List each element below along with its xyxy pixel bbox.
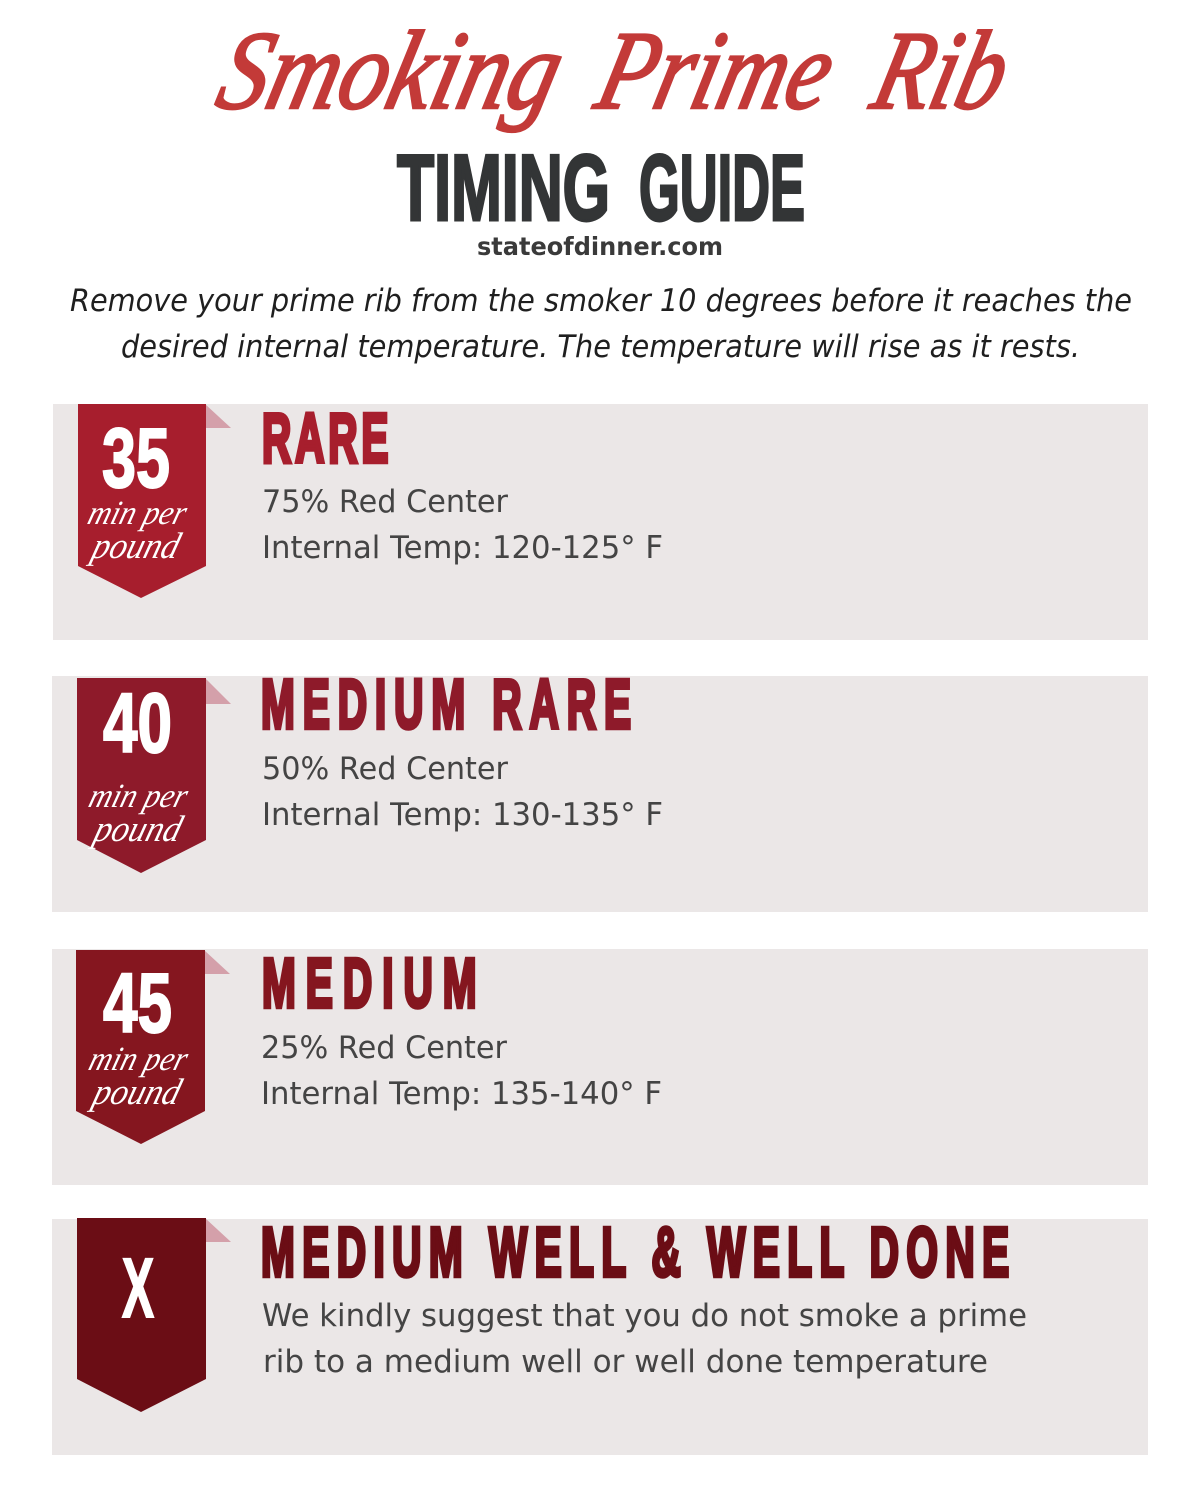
subtitle: Timing Guide: TIMING: [397, 135, 610, 240]
details: rare: [262, 484, 663, 566]
title: Smoking Prime Rib: Rib: [861, 9, 1022, 133]
icon: rare ribbon: [78, 404, 231, 598]
icon: rare ribbon: 35: [102, 411, 170, 505]
intro text: [70, 283, 1132, 365]
icon: rare ribbon: min per: [84, 494, 192, 532]
panel: medium well and well done: [52, 1214, 1148, 1455]
panel: medium: [52, 945, 1148, 1185]
details: medium well and well done: rib to a medium well or well done temperature: [263, 1344, 988, 1380]
details: medium: [261, 1030, 662, 1112]
details: rare: 75% Red Center: [262, 484, 508, 520]
icon: medium ribbon: [76, 950, 230, 1144]
intro text: Remove your prime rib from the smoker 10 degrees before it reaches the: [70, 283, 1132, 319]
heading: medium rare: MEDIUM RARE: [261, 666, 631, 744]
website: stateofdinner.com: [477, 232, 723, 261]
icon: medium rare ribbon: min per: [85, 777, 193, 815]
title: Smoking Prime Rib: Smoking: [207, 9, 576, 133]
details: medium: 25% Red Center: [261, 1030, 507, 1066]
details: medium rare: 50% Red Center: [262, 751, 508, 787]
icon: medium ribbon: pound: [86, 1072, 186, 1113]
icon: medium ribbon: 45: [103, 956, 172, 1050]
icon: X ribbon: X: [122, 1241, 154, 1335]
intro text: desired internal temperature. The temperature will rise as it rests.: [121, 329, 1080, 365]
icon: medium ribbon: min per: [85, 1040, 193, 1078]
subtitle: Timing Guide: GUIDE: [639, 135, 805, 240]
details: medium well and well done: [262, 1298, 1027, 1380]
icon: medium rare ribbon: pound: [87, 809, 187, 850]
panel: rare: [53, 400, 1148, 640]
icon: medium rare ribbon: [77, 676, 231, 873]
heading: medium well and well done: MEDIUM WELL & WELL DONE: [261, 1214, 1009, 1292]
details: medium rare: [262, 751, 663, 833]
details: medium: Internal Temp: 135-140° F: [261, 1076, 662, 1112]
heading: medium: MEDIUM: [262, 945, 477, 1023]
details: medium rare: Internal Temp: 130-135° F: [262, 797, 663, 833]
title: Smoking Prime Rib: Prime: [585, 9, 847, 133]
details: medium well and well done: We kindly suggest that you do not smoke a prime: [262, 1298, 1027, 1334]
icon: medium rare ribbon: 40: [103, 676, 172, 770]
panel: medium rare: [52, 666, 1148, 912]
heading: rare: RARE: [262, 400, 388, 478]
details: rare: Internal Temp: 120-125° F: [262, 530, 663, 566]
title: Smoking Prime Rib: [207, 9, 1022, 133]
icon: X ribbon: [77, 1218, 231, 1412]
icon: rare ribbon: pound: [85, 526, 185, 567]
